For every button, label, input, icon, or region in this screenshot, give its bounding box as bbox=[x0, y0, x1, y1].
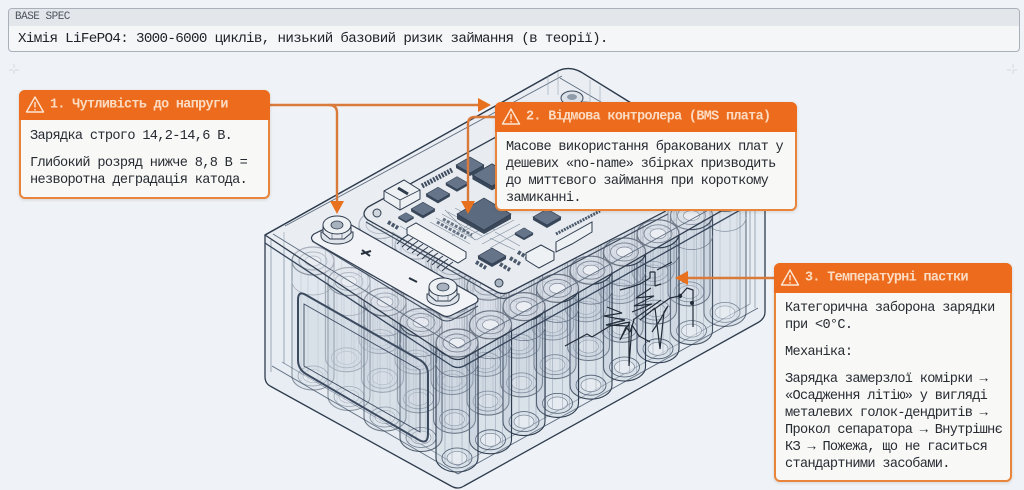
arrow 1 to terminal bbox=[270, 98, 491, 214]
callout 2: BMS failure bbox=[495, 102, 797, 211]
base spec label bbox=[9, 9, 1019, 26]
base spec text: Хімія LiFePO4: 3000-6000 циклів, низький базовий ризик займання (в теорії). bbox=[18, 31, 608, 47]
callout 3 mechanics label: Механіка: bbox=[785, 345, 852, 360]
flat ribbon connector bbox=[407, 223, 466, 263]
callout 1 heading: 1. Чутливість до напруги bbox=[50, 98, 228, 112]
connectors and small parts bbox=[384, 180, 420, 210]
arrow 2 to BMS chip bbox=[461, 117, 496, 214]
minus sign bbox=[409, 278, 417, 282]
callout 1: voltage sensitivity bbox=[19, 90, 270, 199]
callout 3: temperature traps bbox=[774, 263, 1012, 482]
bolt negative bbox=[427, 278, 459, 306]
callout 3 heading bbox=[774, 263, 1012, 293]
lid bbox=[265, 68, 765, 368]
callout 1 line: Зарядка строго 14,2-14,6 В. bbox=[30, 129, 232, 144]
bolt positive bbox=[321, 216, 353, 244]
base spec label: BASE SPEC bbox=[15, 11, 70, 23]
callout 2 heading bbox=[495, 102, 797, 132]
BMS circuit board bbox=[364, 124, 668, 298]
battery case back and tray bbox=[265, 68, 765, 488]
registration marks bbox=[9, 64, 1019, 76]
callout 3 ban text: Категорична заборона зарядки при <0°C. bbox=[785, 301, 995, 333]
callout 3 heading: 3. Температурні пастки bbox=[805, 270, 968, 286]
icon: warning bbox=[780, 269, 800, 286]
board traces bbox=[392, 208, 526, 250]
icon: warning bbox=[26, 96, 44, 113]
callout 1 paragraph: Глибокий розряд нижче 8,8 В = незворотна деградація катода. bbox=[30, 156, 247, 188]
chips bbox=[456, 157, 484, 176]
icon: warning bbox=[502, 108, 520, 125]
base spec panel bbox=[8, 8, 1020, 52]
arrow 3 to dendrite bbox=[675, 271, 775, 285]
callout 1 heading bbox=[19, 90, 270, 120]
terminal plate with bolts bbox=[312, 216, 478, 321]
plus sign bbox=[361, 250, 371, 256]
callout 3 mechanics text: Зарядка замерзлої комірки → «Осадження літію» у вигляді металевих голок-дендритів → Прокол сепаратора → Внутрішнє КЗ → Пожежа, що не гаситься стандартними засобами. bbox=[785, 372, 1002, 472]
dendrite crack burst bbox=[565, 262, 693, 366]
side window recess bbox=[298, 293, 428, 442]
callout 2 paragraph: Масове використання бракованих плат у дешевих «no-name» збірках призводить до миттєвого займання при короткому замиканні. bbox=[506, 140, 783, 206]
battery cells bbox=[292, 101, 746, 472]
callout 2 heading: 2. Відмова контролера (BMS плата) bbox=[526, 110, 770, 124]
main controller chip bbox=[457, 198, 511, 234]
